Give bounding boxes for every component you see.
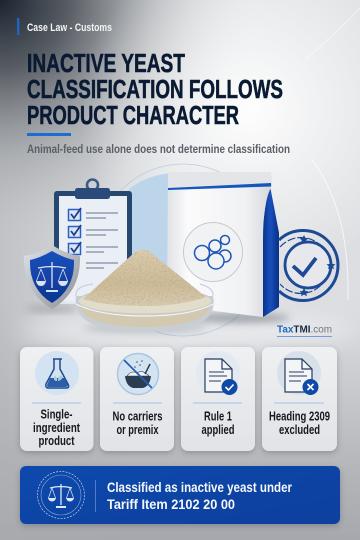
card: heading 2309 excluded	[262, 347, 337, 451]
title	[27, 50, 283, 130]
card: rule 1 applied: applied	[202, 423, 234, 437]
title underline	[27, 133, 71, 136]
illustration backdrop circle	[97, 164, 269, 336]
card: single-ingredient product	[20, 347, 94, 451]
card: no carriers or premix	[100, 347, 174, 451]
icon: document with cross	[277, 351, 321, 395]
icon: flask	[35, 351, 79, 395]
card: heading 2309 excluded: Heading 2309	[269, 410, 330, 424]
card: single-ingredient product: ingredient	[33, 421, 81, 435]
card: no carriers or premix: or premix	[116, 423, 159, 437]
icon: clipboard checklist	[54, 180, 132, 304]
card: rule 1 applied: Rule 1	[204, 410, 232, 424]
card: heading 2309 excluded: excluded	[279, 423, 320, 437]
brand logo: TaxTMI.com	[277, 324, 332, 336]
card: single-ingredient product: Single-	[40, 408, 72, 422]
icon: document with check	[196, 351, 240, 395]
icon: scales shield	[24, 245, 80, 312]
icon: prohibited mixing bowl	[118, 354, 158, 394]
card: rule 1 applied	[181, 347, 255, 451]
conclusion banner: Classified as inactive yeast under	[107, 480, 293, 495]
title: PRODUCT CHARACTER	[27, 102, 239, 130]
category tag: Case Law - Customs	[27, 22, 112, 34]
card: single-ingredient product: product	[38, 434, 75, 448]
conclusion banner: Tariff Item 2102 20 00	[107, 497, 235, 512]
category tag	[17, 18, 112, 35]
icon: yeast cells	[184, 222, 242, 282]
icon: verification stamp	[279, 230, 338, 300]
card: no carriers or premix: No carriers	[112, 410, 163, 424]
subtitle: Animal-feed use alone does not determine classification	[27, 142, 290, 156]
powder in petri dish	[76, 250, 214, 333]
icon: scales emblem	[38, 472, 84, 518]
product bag	[167, 172, 290, 323]
title: INACTIVE YEAST	[27, 50, 185, 78]
conclusion banner	[20, 466, 340, 524]
